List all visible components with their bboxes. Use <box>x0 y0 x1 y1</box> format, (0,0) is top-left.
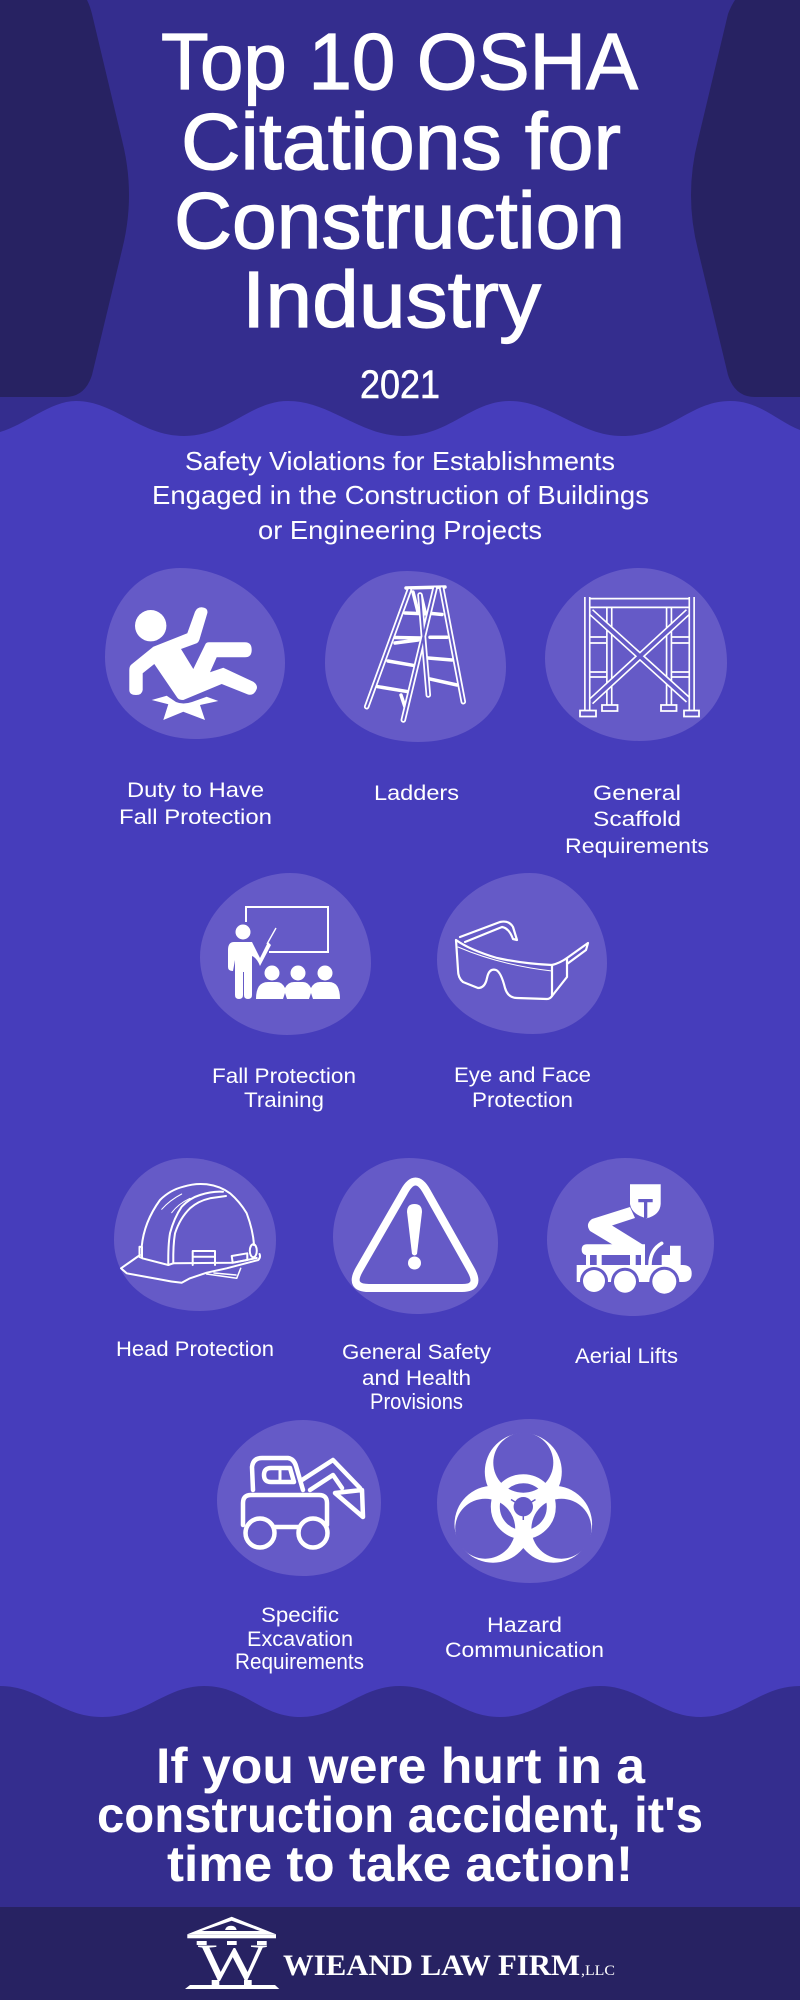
icon blob <box>114 1158 276 1311</box>
call to action: time to take action! <box>167 1836 633 1892</box>
icon: instructor and class <box>228 907 340 999</box>
icon: warning triangle <box>356 1182 474 1288</box>
label: Aerial Lifts <box>575 1345 678 1368</box>
item: eye and face protection <box>437 873 607 1112</box>
item: head protection <box>114 1158 276 1361</box>
icon blob <box>547 1158 714 1316</box>
logo: Wieand Law Firm <box>185 1917 615 1992</box>
label <box>445 1614 604 1662</box>
label: Fall Protection <box>119 806 272 829</box>
item: specific excavation requirements <box>217 1420 381 1674</box>
item: fall protection training <box>200 873 371 1112</box>
label <box>565 782 709 858</box>
subtitle: Safety Violations for Establishments <box>185 446 615 476</box>
label: Requirements <box>565 835 709 858</box>
icon: falling person <box>129 607 257 720</box>
icon blob <box>105 568 285 739</box>
title: Top 10 OSHA <box>161 17 639 106</box>
label <box>212 1065 356 1112</box>
icon blob <box>325 571 506 742</box>
label: Scaffold <box>593 808 681 831</box>
title: Industry <box>242 255 541 344</box>
icon blob <box>200 873 371 1035</box>
label <box>119 779 272 829</box>
icon: courthouse emblem: W <box>198 1934 267 1992</box>
icon blob <box>437 873 607 1034</box>
panel: header background <box>0 0 800 450</box>
label: Excavation <box>247 1628 353 1651</box>
firm name: WIEAND LAW FIRM <box>283 1949 580 1982</box>
label: Provisions <box>370 1389 463 1414</box>
item: duty to have fall protection <box>105 568 285 829</box>
label: Duty to Have <box>127 779 264 802</box>
item: general safety and health provisions <box>333 1158 498 1414</box>
subtitle: or Engineering Projects <box>258 515 542 545</box>
subtitle: Engaged in the Construction of Buildings <box>152 480 649 510</box>
icon: biohazard symbol <box>454 1433 592 1563</box>
label: Specific <box>261 1604 339 1627</box>
left dark side panel <box>0 0 129 397</box>
title <box>161 17 639 344</box>
subtitle <box>152 446 649 545</box>
item: aerial lifts <box>547 1158 714 1368</box>
call to action: construction accident, it's <box>97 1787 703 1843</box>
icon blob <box>545 568 727 741</box>
right dark side panel <box>691 0 800 397</box>
icon blob <box>217 1420 381 1576</box>
label: Ladders <box>374 782 459 805</box>
panel: main wavy body <box>0 401 800 1717</box>
call to action: If you were hurt in a <box>156 1738 646 1794</box>
label: General <box>593 782 681 805</box>
item: general scaffold requirements <box>545 568 727 858</box>
label: Protection <box>472 1089 573 1112</box>
title: Citations for <box>181 97 621 186</box>
label <box>235 1604 364 1674</box>
icon: excavator <box>243 1458 363 1548</box>
panel: footer band <box>0 1907 800 2000</box>
icon blob <box>333 1158 498 1314</box>
icon: step ladder <box>367 587 463 720</box>
label <box>454 1064 591 1112</box>
firm suffix: ,LLC <box>581 1963 615 1979</box>
icon: scaffold <box>580 597 699 716</box>
label: and Health <box>362 1367 471 1390</box>
label: Requirements <box>235 1649 364 1674</box>
icon blob <box>437 1419 611 1583</box>
label: Training <box>244 1089 324 1112</box>
label: General Safety <box>342 1341 492 1364</box>
icon: aerial lift truck <box>577 1184 692 1297</box>
item: hazard communication <box>437 1419 611 1662</box>
label: Communication <box>445 1639 604 1662</box>
title: Construction <box>174 176 625 265</box>
label: Head Protection <box>116 1338 274 1361</box>
icon: hard hat <box>121 1184 260 1283</box>
year: 2021 <box>360 363 440 407</box>
call to action <box>97 1738 703 1892</box>
icon: safety goggles <box>456 922 588 999</box>
item: ladders <box>325 571 506 805</box>
label <box>342 1341 492 1414</box>
label: Eye and Face <box>454 1064 591 1087</box>
label: Fall Protection <box>212 1065 356 1088</box>
label: Hazard <box>487 1614 562 1637</box>
icon: courthouse emblem <box>185 1917 279 1992</box>
